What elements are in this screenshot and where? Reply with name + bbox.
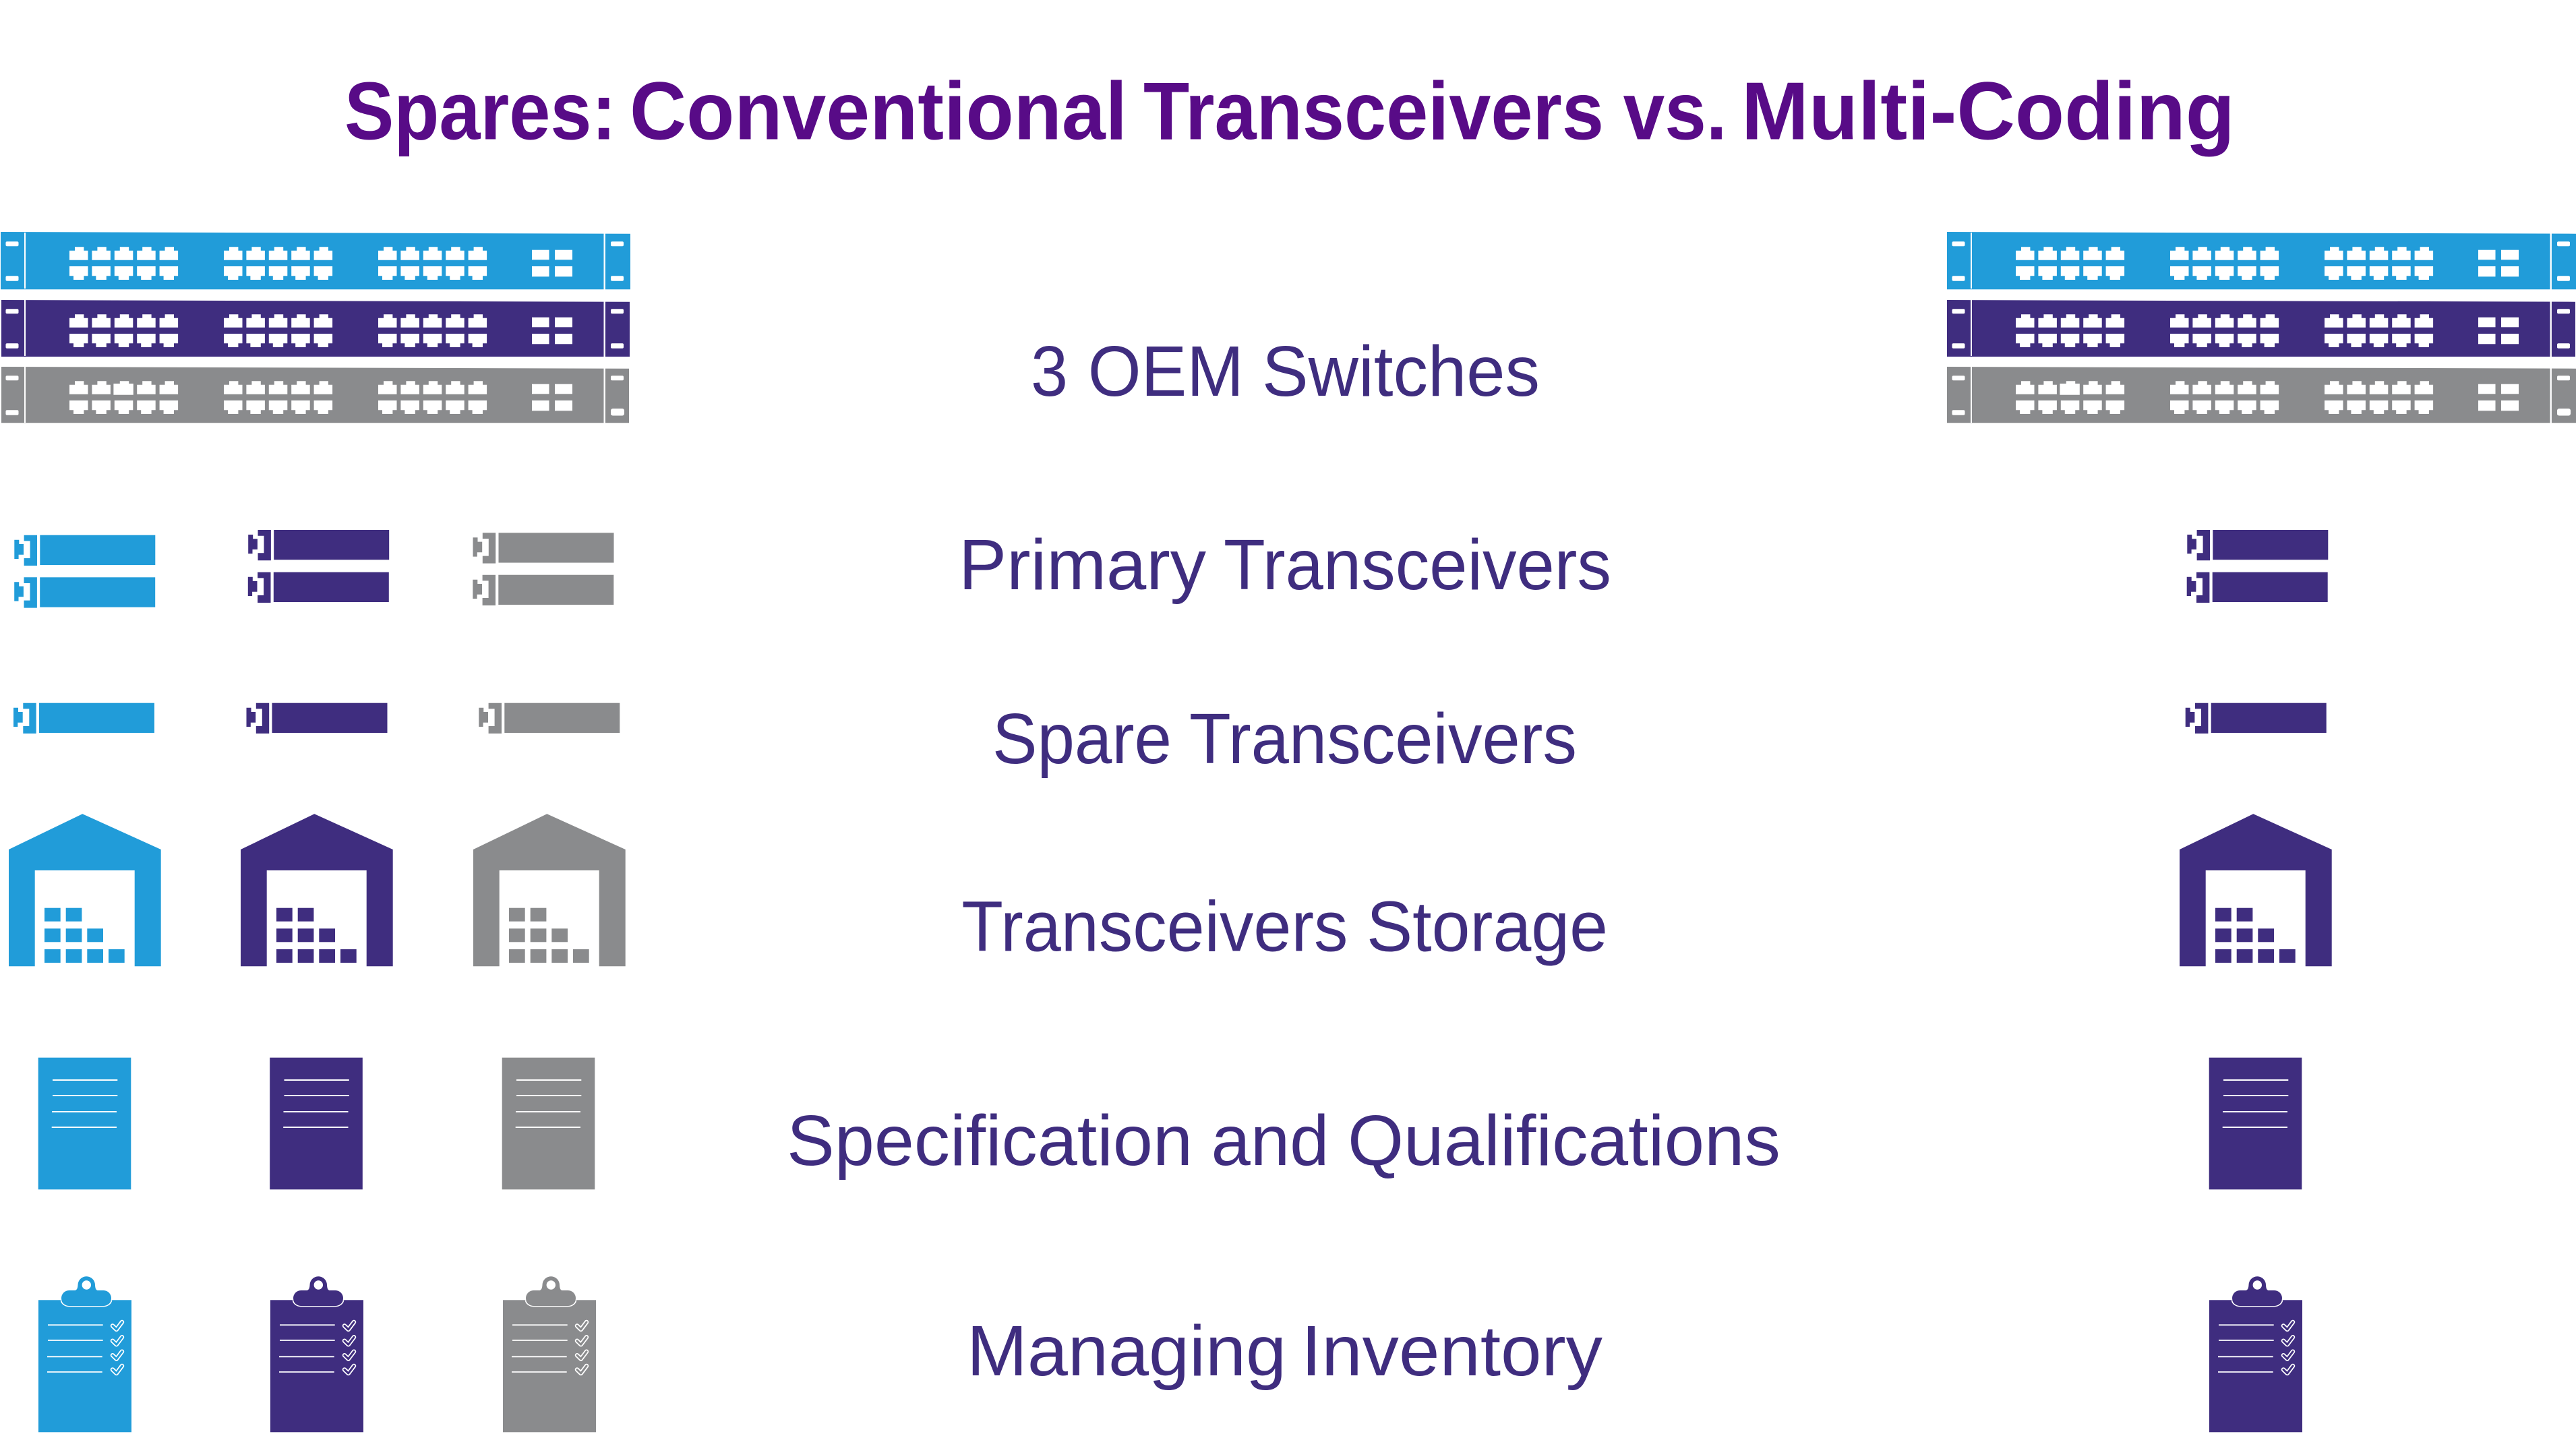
label: Specification and Qualifications bbox=[787, 1101, 1780, 1181]
label: Specification and Qualifications: Specification bbox=[787, 1101, 1193, 1181]
icon: gray spare transceiver bbox=[479, 703, 620, 734]
label: Spare Transceivers bbox=[992, 699, 1577, 779]
label: Specification and Qualifications: Qualifications bbox=[1348, 1101, 1780, 1181]
icons: purple primary transceivers bbox=[248, 530, 389, 603]
icon: blue specification document bbox=[38, 1058, 131, 1189]
icon: gray switch, multi-coding bbox=[1947, 367, 2576, 424]
label: 3 OEM Switches: Switches bbox=[1262, 332, 1540, 411]
icon: purple switch, conventional bbox=[1, 300, 630, 357]
label: Transceivers Storage: Storage bbox=[1367, 887, 1608, 966]
title: Transceivers bbox=[1143, 65, 1604, 157]
title bbox=[345, 65, 2235, 157]
icons: gray primary transceivers bbox=[473, 533, 613, 605]
icon: gray inventory clipboard bbox=[503, 1276, 596, 1432]
label: Spare Transceivers: Transceivers bbox=[1189, 699, 1577, 779]
label: Specification and Qualifications: and bbox=[1211, 1101, 1329, 1181]
label: Primary Transceivers: Primary bbox=[959, 525, 1206, 605]
icon: multi-coding inventory clipboard bbox=[2209, 1276, 2302, 1432]
title: Conventional bbox=[630, 65, 1127, 157]
icon: purple inventory clipboard bbox=[270, 1276, 363, 1432]
icon: blue switch, conventional bbox=[1, 232, 630, 290]
icon: blue warehouse bbox=[9, 814, 161, 966]
title: Multi-Coding bbox=[1741, 65, 2235, 157]
icon: gray specification document bbox=[502, 1058, 595, 1189]
label: 3 OEM Switches bbox=[1031, 332, 1540, 411]
label: 3 OEM Switches: OEM bbox=[1088, 332, 1244, 411]
label: Spare Transceivers: Spare bbox=[992, 699, 1172, 779]
label: 3 OEM Switches: 3 bbox=[1031, 332, 1068, 411]
title: Spares: bbox=[345, 65, 616, 157]
label: Transceivers Storage: Transceivers bbox=[961, 887, 1348, 966]
icon: gray switch, conventional bbox=[1, 367, 629, 424]
icon: purple specification document bbox=[270, 1058, 363, 1189]
icon: multi-coding spare transceiver bbox=[2186, 703, 2327, 734]
icon: blue switch, multi-coding bbox=[1947, 232, 2576, 290]
icons: multi-coding primary transceivers bbox=[2187, 530, 2328, 603]
icon: multi-coding specification document bbox=[2209, 1058, 2302, 1189]
label: Primary Transceivers: Transceivers bbox=[1224, 525, 1611, 605]
label: Primary Transceivers bbox=[959, 525, 1611, 605]
title: vs. bbox=[1623, 65, 1727, 157]
icon: purple warehouse bbox=[241, 814, 393, 966]
label: Managing Inventory: Inventory bbox=[1301, 1311, 1602, 1391]
icon: blue inventory clipboard bbox=[38, 1276, 131, 1432]
icon: blue spare transceiver bbox=[13, 703, 154, 734]
icons: blue primary transceivers bbox=[14, 535, 155, 608]
icon: gray warehouse bbox=[473, 814, 626, 966]
label: Managing Inventory: Managing bbox=[967, 1311, 1286, 1391]
icon: purple spare transceiver bbox=[247, 703, 387, 734]
icon: multi-coding warehouse bbox=[2180, 814, 2332, 966]
label: Managing Inventory bbox=[967, 1311, 1602, 1391]
label: Transceivers Storage bbox=[961, 887, 1608, 966]
icon: purple switch, multi-coding bbox=[1947, 300, 2575, 357]
